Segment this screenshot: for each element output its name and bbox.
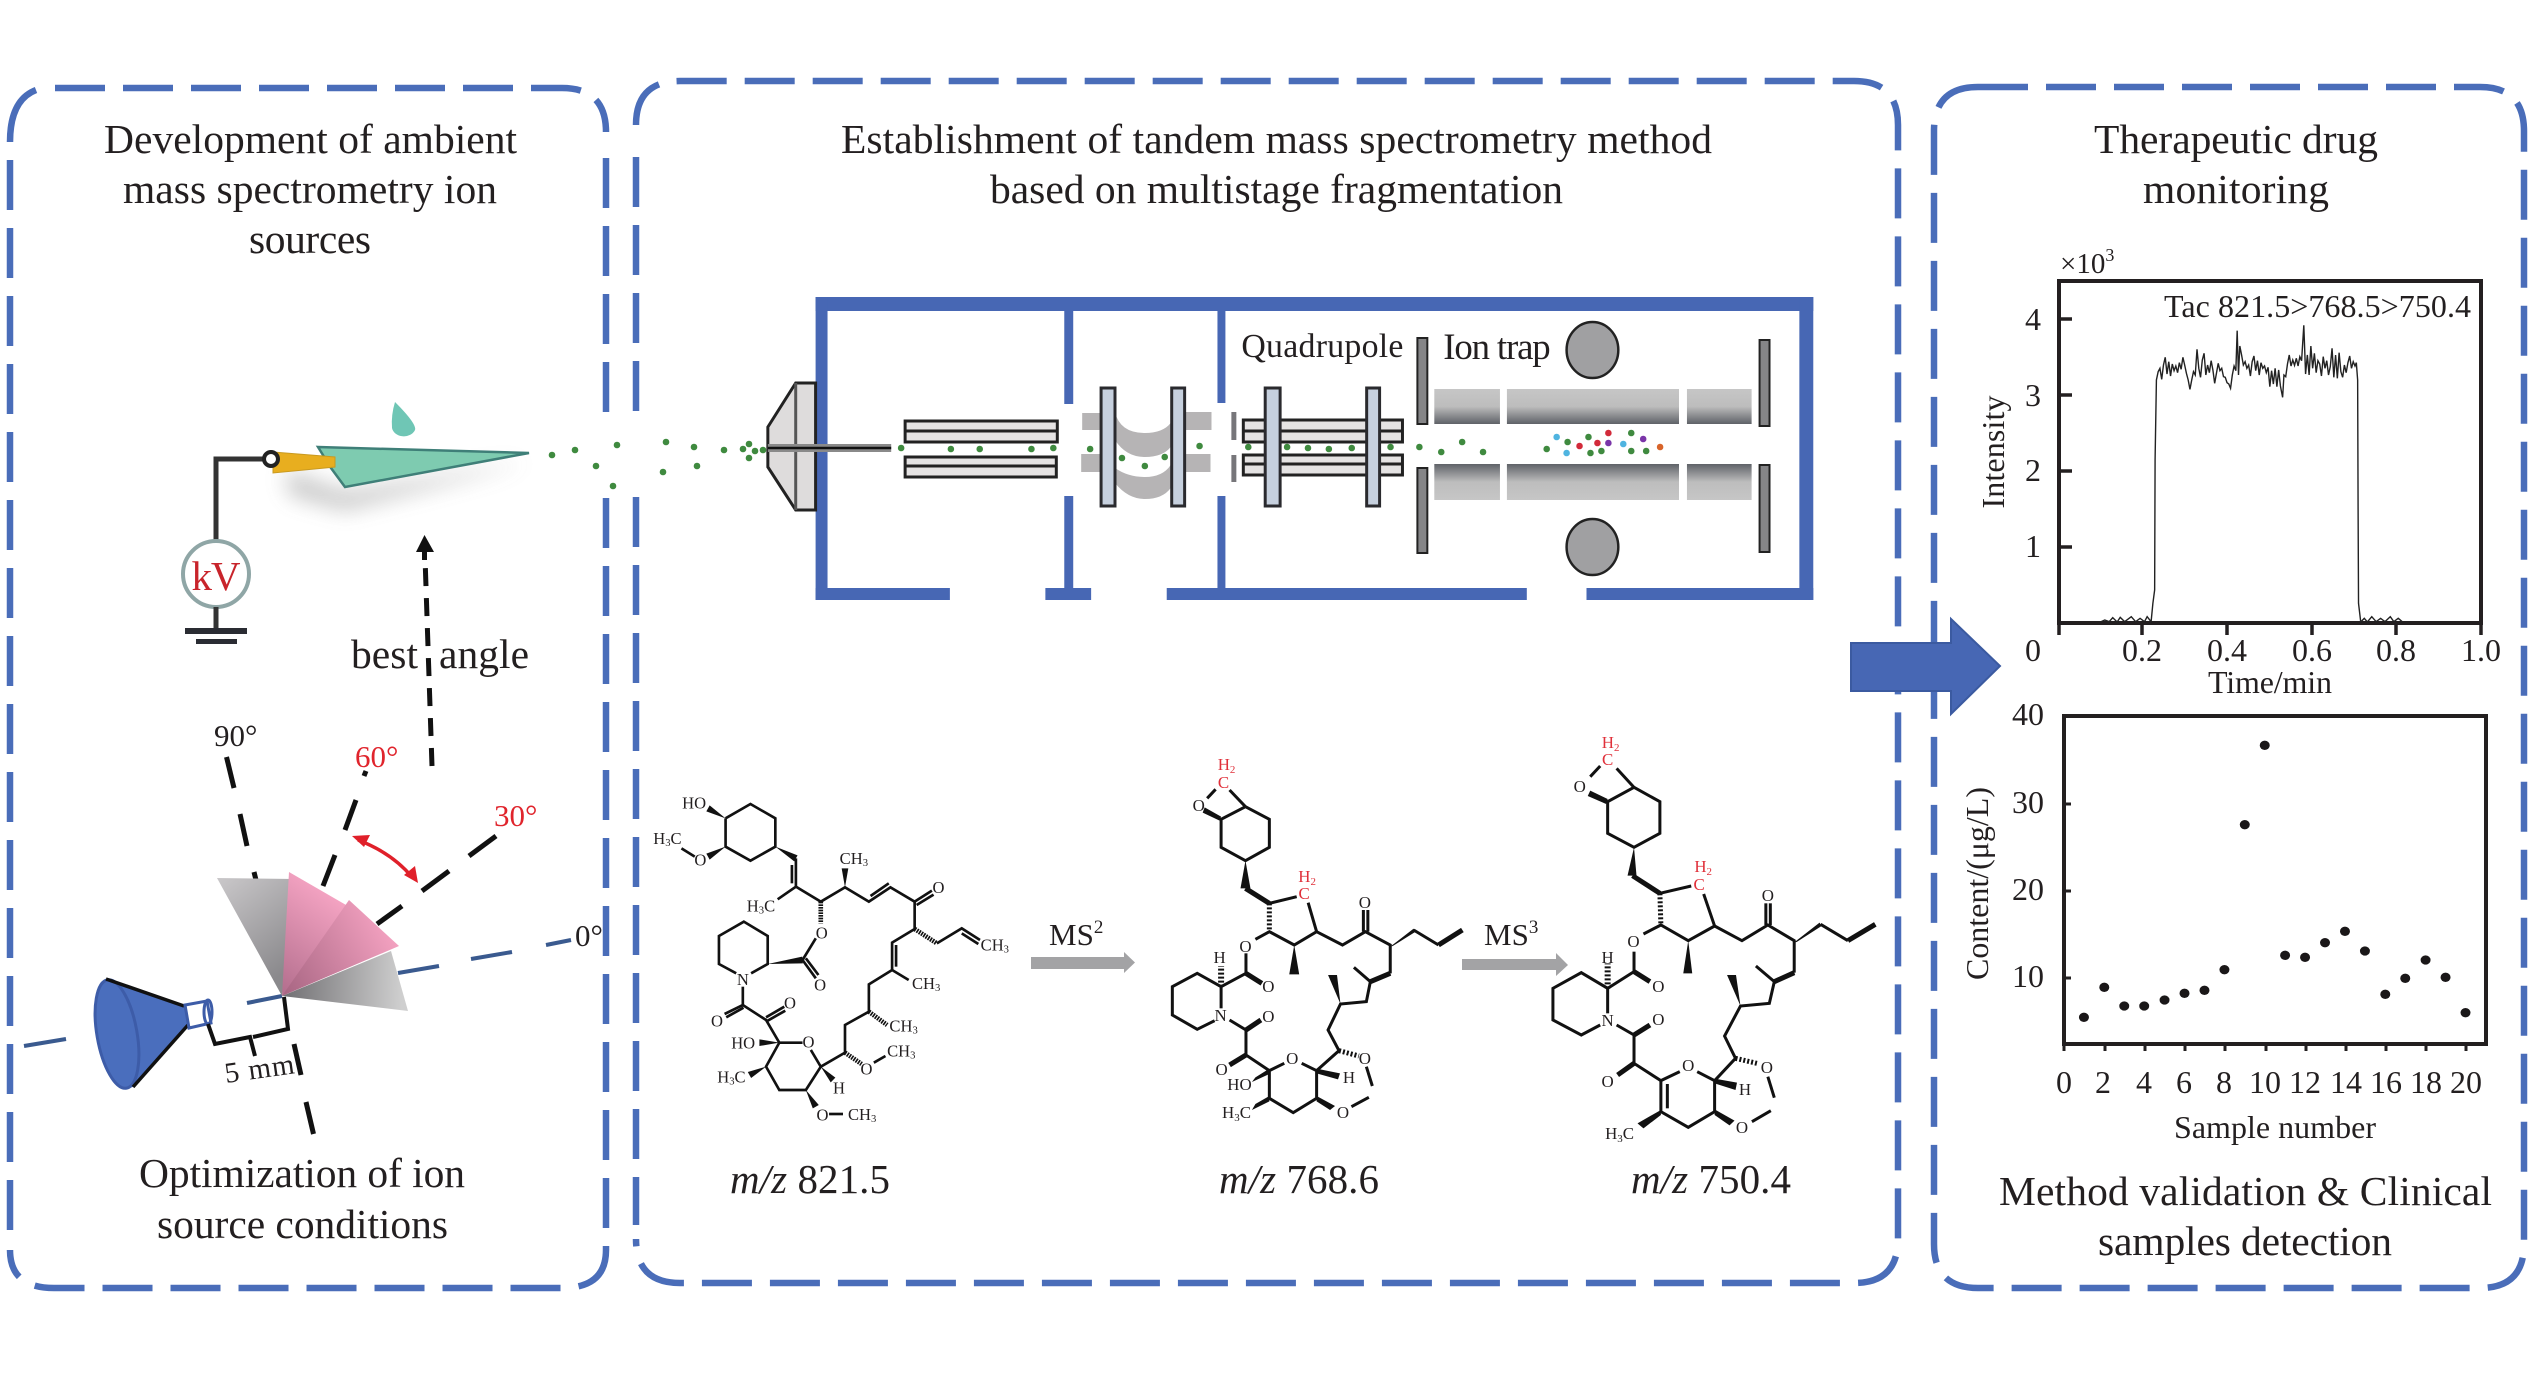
- arrow: MS3 fragmentation step: MS: [1484, 917, 1529, 952]
- chromatogram signal trace: [2100, 325, 2403, 622]
- molecule: fragment m/z 768.6: H: [1343, 1068, 1355, 1087]
- heading: development of ion sources: [104, 116, 517, 262]
- molecule: fragment m/z 768.6: O: [1262, 977, 1274, 996]
- label: quadrupole: Quadrupole: [1241, 328, 1403, 365]
- molecule: fragment m/z 768.6: 2: [1311, 876, 1316, 888]
- scatter axis labels: 18: [2410, 1064, 2442, 1100]
- chromatogram axis labels: Intensity: [1975, 396, 2011, 508]
- chromatogram axis labels: Tac 821.5>768.5>750.4: [2164, 288, 2471, 324]
- molecule: tacrolimus precursor m/z 821.5: C: [735, 1067, 746, 1086]
- arrow: MS3 fragmentation step: 3: [1529, 917, 1538, 938]
- molecule: fragment m/z 768.6: H: [1222, 1103, 1234, 1122]
- heading: therapeutic drug monitoring: monitoring: [2143, 166, 2329, 212]
- arrow: MS2 fragmentation step: [1031, 917, 1135, 973]
- icon: blue mass spectrometer inlet cone: [88, 976, 212, 1092]
- heading: establishment of tandem MS method: Establishment of tandem mass spectrometry method: [841, 116, 1712, 162]
- molecule: tacrolimus precursor m/z 821.5: 3: [912, 1026, 918, 1037]
- chromatogram axis labels: 0.2: [2122, 632, 2162, 668]
- diagram: mass spectrometer schematic: [768, 297, 1813, 600]
- angle labels: [214, 718, 603, 953]
- molecule: tacrolimus precursor m/z 821.5: C: [671, 829, 682, 848]
- heading: development of ion sources: mass spectrometry ion: [123, 166, 497, 212]
- molecule: tacrolimus precursor m/z 821.5: CH: [848, 1105, 871, 1124]
- molecule: fragment m/z 768.6: H: [1298, 867, 1311, 886]
- molecule: fragment m/z 768.6: O: [1215, 1060, 1228, 1079]
- molecule: fragment m/z 750.4: O: [1574, 777, 1586, 796]
- molecule: fragment m/z 768.6: [1172, 755, 1462, 1124]
- arrow: MS2 fragmentation step: MS: [1049, 917, 1094, 952]
- scatter axis labels: 2: [2095, 1064, 2111, 1100]
- arrow: MS3 fragmentation step: [1462, 917, 1568, 976]
- chromatogram axis labels: 3: [2105, 245, 2114, 265]
- icon: voltage source circuit: kV: [192, 553, 241, 599]
- molecule: fragment m/z 768.6: O: [1193, 796, 1205, 815]
- molecule: tacrolimus precursor m/z 821.5: O: [784, 993, 796, 1012]
- chromatogram axis labels: ×10: [2060, 248, 2105, 280]
- molecule: fragment m/z 768.6: O: [1359, 893, 1371, 912]
- chart: sample content scatter plot: [1959, 696, 2486, 1145]
- arrow: best angle dashed upward: [416, 535, 434, 766]
- molecule: tacrolimus precursor m/z 821.5: N: [737, 970, 749, 989]
- heading: establishment of tandem MS method: based on multistage fragmentation: [990, 166, 1563, 212]
- molecule: tacrolimus precursor m/z 821.5: H: [833, 1078, 845, 1097]
- molecule: tacrolimus precursor m/z 821.5: 3: [759, 906, 764, 917]
- molecule: tacrolimus precursor m/z 821.5: H: [653, 829, 665, 848]
- molecule: fragment m/z 768.6: H: [1213, 948, 1226, 967]
- scatter axis labels: 16: [2370, 1064, 2402, 1100]
- label: best angle: angle: [439, 631, 529, 677]
- scatter axis labels: 40: [2012, 696, 2044, 732]
- chromatogram axis ticks: [2059, 319, 2481, 635]
- heading: development of ion sources: Development of ambient: [104, 116, 517, 162]
- molecule: fragment m/z 768.6: O: [1262, 1007, 1274, 1026]
- molecule: fragment m/z 750.4: H: [1605, 1124, 1617, 1143]
- scatter data points: [2079, 741, 2471, 1022]
- molecule: fragment m/z 768.6: C: [1218, 773, 1229, 792]
- molecule: fragment m/z 768.6: 3: [1234, 1112, 1240, 1124]
- icon: double headed red angle arrow: [352, 835, 418, 883]
- molecule: tacrolimus precursor m/z 821.5: CH: [840, 849, 863, 868]
- curved ion funnel: [1081, 388, 1211, 506]
- caption: method validation and clinical samples detection: samples detection: [2098, 1218, 2392, 1264]
- chromatogram axis labels: 1.0: [2461, 632, 2501, 668]
- molecule: tacrolimus precursor m/z 821.5: CH: [887, 1042, 910, 1061]
- chromatogram axis labels: 3: [2025, 377, 2041, 413]
- molecule: fragment m/z 768.6: O: [1359, 1049, 1371, 1068]
- molecule: tacrolimus precursor m/z 821.5: O: [694, 851, 706, 870]
- ion plume dots: [549, 423, 766, 489]
- molecule: tacrolimus precursor m/z 821.5: H: [747, 897, 759, 916]
- scatter axis labels: 20: [2012, 871, 2044, 907]
- molecule: fragment m/z 768.6: HO: [1227, 1075, 1252, 1094]
- scatter axis labels: 6: [2176, 1064, 2192, 1100]
- icon: spray emitter with droplet: [273, 402, 529, 510]
- molecule: tacrolimus precursor m/z 821.5: 3: [863, 858, 868, 869]
- label: best angle: best: [351, 631, 418, 677]
- scatter axis labels: 8: [2216, 1064, 2232, 1100]
- icon: voltage source circuit: [183, 452, 278, 644]
- molecule: tacrolimus precursor m/z 821.5: O: [816, 923, 828, 942]
- molecule: fragment m/z 750.4: 3: [1617, 1133, 1623, 1145]
- panel: therapeutic drug monitoring: [1934, 87, 2524, 1288]
- caption: optimization of ion source conditions: source conditions: [157, 1201, 448, 1247]
- molecule: tacrolimus precursor m/z 821.5: 3: [665, 838, 671, 849]
- molecule: tacrolimus precursor m/z 821.5: [653, 793, 1009, 1125]
- scatter axis labels: 12: [2289, 1064, 2321, 1100]
- scatter axis labels: 30: [2012, 784, 2044, 820]
- caption: optimization of ion source conditions: [139, 1150, 465, 1247]
- molecule: tacrolimus precursor m/z 821.5: O: [816, 1106, 828, 1125]
- label: m/z 768.6: m/z 768.6: [1219, 1156, 1379, 1202]
- heading: establishment of tandem MS method: [841, 116, 1712, 212]
- molecule: tacrolimus precursor m/z 821.5: 3: [729, 1076, 735, 1087]
- chart: intensity vs time chromatogram: [1975, 245, 2501, 700]
- molecule: fragment m/z 750.4: C: [1602, 750, 1613, 769]
- scatter axis labels: 20: [2450, 1064, 2482, 1100]
- molecule: fragment m/z 768.6: O: [1337, 1103, 1349, 1122]
- panel: ambient mass spectrometry ion sources: [10, 88, 613, 1288]
- molecule: fragment m/z 768.6: C: [1240, 1103, 1251, 1122]
- heading: therapeutic drug monitoring: [2094, 116, 2378, 212]
- angle axis lines: [24, 757, 571, 1134]
- panel border middle: [629, 81, 1898, 1283]
- molecule: tacrolimus precursor m/z 821.5: O: [933, 878, 945, 897]
- heading: therapeutic drug monitoring: Therapeutic drug: [2094, 116, 2378, 162]
- molecule: fragment m/z 750.4: O: [1761, 1058, 1773, 1077]
- chromatogram axis labels: Time/min: [2208, 664, 2332, 700]
- distance bracket 5 mm: [208, 997, 297, 1090]
- chromatogram axis labels: 1: [2025, 528, 2041, 564]
- molecule: fragment m/z 750.4: C: [1623, 1124, 1634, 1143]
- molecule: tacrolimus precursor m/z 821.5: HO: [731, 1033, 755, 1052]
- scatter axis ticks: [2064, 804, 2466, 1051]
- molecule: tacrolimus precursor m/z 821.5: HO: [682, 793, 706, 812]
- label: ion trap: Ion trap: [1443, 326, 1551, 367]
- chromatogram axis labels: [1975, 245, 2501, 700]
- chromatogram axis labels: 0: [2025, 632, 2041, 668]
- molecule: tacrolimus precursor m/z 821.5: H: [717, 1067, 729, 1086]
- molecule: fragment m/z 750.4: O: [1682, 1056, 1694, 1075]
- molecule: fragment m/z 750.4: [1553, 733, 1875, 1145]
- caption: method validation and clinical samples detection: [1999, 1168, 2492, 1264]
- angle labels: 30°: [494, 798, 537, 833]
- molecule: tacrolimus precursor m/z 821.5: 3: [910, 1051, 915, 1062]
- spray cones at angles: [217, 872, 408, 1011]
- chromatogram axis labels: 4: [2025, 301, 2041, 337]
- instrument housing walls: [816, 297, 1813, 600]
- angle labels: 0°: [575, 918, 603, 953]
- angle labels: 90°: [214, 718, 257, 753]
- molecule: tacrolimus precursor m/z 821.5: 3: [1004, 945, 1009, 956]
- molecule: fragment m/z 750.4: C: [1694, 875, 1705, 894]
- scatter axis labels: Content/(μg/L): [1959, 787, 1995, 980]
- molecule: fragment m/z 768.6: N: [1214, 1006, 1227, 1025]
- panel: tandem mass spectrometry method: [629, 81, 1898, 1283]
- chromatogram axis labels: 0.4: [2207, 632, 2247, 668]
- molecule: tacrolimus precursor m/z 821.5: CH: [889, 1017, 912, 1036]
- molecule: tacrolimus precursor m/z 821.5: CH: [912, 974, 935, 993]
- molecule: fragment m/z 750.4: H: [1602, 733, 1614, 752]
- molecule: fragment m/z 768.6: O: [1239, 937, 1252, 956]
- caption: optimization of ion source conditions: Optimization of ion: [139, 1150, 465, 1196]
- molecule: fragment m/z 750.4: O: [1652, 1010, 1664, 1029]
- molecule: tacrolimus precursor m/z 821.5: C: [764, 897, 775, 916]
- caption: method validation and clinical samples detection: Method validation & Clinical: [1999, 1168, 2492, 1214]
- arrow: large blue workflow arrow: [1851, 619, 2000, 714]
- scatter axis labels: Sample number: [2174, 1109, 2376, 1145]
- scatter axis labels: 10: [2249, 1064, 2281, 1100]
- arrow: MS2 fragmentation step: 2: [1094, 917, 1103, 938]
- molecule: fragment m/z 750.4: O: [1652, 977, 1664, 996]
- molecule: tacrolimus precursor m/z 821.5: O: [803, 1032, 814, 1051]
- scatter axis labels: 10: [2012, 958, 2044, 994]
- molecule: fragment m/z 768.6: 2: [1230, 764, 1235, 776]
- molecule: fragment m/z 750.4: O: [1602, 1072, 1614, 1091]
- molecule: tacrolimus precursor m/z 821.5: O: [814, 976, 826, 995]
- molecule: fragment m/z 768.6: O: [1286, 1049, 1298, 1068]
- molecule: tacrolimus precursor m/z 821.5: O: [861, 1060, 873, 1079]
- chromatogram axis labels: 0.6: [2292, 632, 2332, 668]
- molecule: fragment m/z 750.4: H: [1739, 1080, 1751, 1099]
- ion trap electrodes: [1417, 322, 1770, 575]
- molecule: fragment m/z 750.4: 2: [1614, 742, 1619, 754]
- chromatogram axis labels: 2: [2025, 452, 2041, 488]
- chromatogram axis labels: 0.8: [2376, 632, 2416, 668]
- molecule: tacrolimus precursor m/z 821.5: CH: [981, 936, 1004, 955]
- quadrupole rods and plates: [1231, 388, 1402, 506]
- panel border left: [10, 88, 613, 1288]
- molecule: fragment m/z 768.6: H: [1218, 755, 1230, 774]
- molecule: fragment m/z 750.4: O: [1627, 932, 1640, 951]
- molecule: fragment m/z 750.4: H: [1694, 857, 1707, 876]
- label: m/z 750.4: m/z 750.4: [1631, 1156, 1791, 1202]
- molecule: fragment m/z 750.4: 2: [1707, 866, 1712, 878]
- scatter axis labels: [1959, 696, 2482, 1145]
- molecule: fragment m/z 750.4: O: [1736, 1118, 1748, 1137]
- molecule: fragment m/z 768.6: C: [1299, 884, 1310, 903]
- label: best angle: [351, 631, 529, 677]
- molecule: fragment m/z 750.4: O: [1762, 886, 1774, 905]
- angle labels: 60°: [355, 739, 398, 774]
- ions travelling through the instrument: [898, 430, 1663, 469]
- distance bracket 5 mm: 5 mm: [223, 1048, 297, 1090]
- heading: development of ion sources: sources: [249, 216, 371, 262]
- molecule: fragment m/z 750.4: N: [1602, 1011, 1614, 1030]
- molecule: tacrolimus precursor m/z 821.5: O: [711, 1011, 723, 1030]
- label: m/z 821.5: m/z 821.5: [730, 1156, 890, 1202]
- molecule: fragment m/z 750.4: H: [1602, 948, 1614, 967]
- scatter axis labels: 4: [2136, 1064, 2152, 1100]
- panel border right: [1934, 87, 2524, 1288]
- first ion guide rods: [905, 421, 1057, 477]
- molecule: tacrolimus precursor m/z 821.5: 3: [935, 983, 940, 994]
- scatter axis labels: 14: [2330, 1064, 2362, 1100]
- sampling cone and capillary: [768, 383, 891, 510]
- scatter axis labels: 0: [2056, 1064, 2072, 1100]
- molecule: tacrolimus precursor m/z 821.5: 3: [871, 1114, 876, 1125]
